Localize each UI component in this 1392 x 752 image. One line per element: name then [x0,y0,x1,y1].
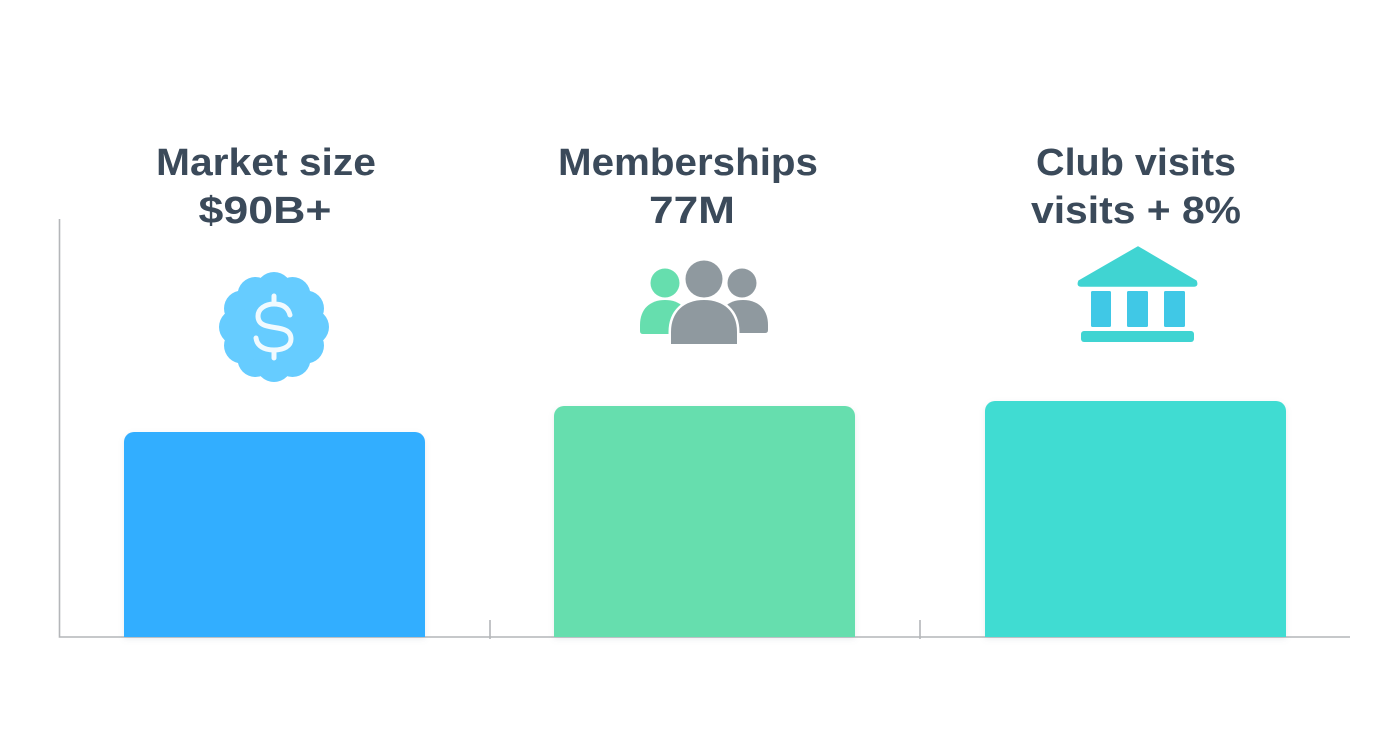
heading: club visits [1031,142,1241,232]
icon: columned building [1078,247,1197,342]
heading: memberships [558,142,818,232]
heading: market size: Market size [156,142,376,184]
heading: market size [156,142,376,232]
chart axes [60,219,1350,639]
icon: group of people [640,260,768,344]
heading: memberships: Memberships [558,142,818,184]
bar: club visits [985,401,1286,637]
heading: club visits: visits + 8% [1031,190,1241,232]
bar: memberships [554,406,855,637]
heading: market size: $90B+ [198,190,332,232]
bar: market size [124,432,425,637]
heading: memberships: 77M [649,190,735,232]
icon: dollar badge [219,272,329,382]
heading: club visits: Club visits [1036,142,1236,184]
